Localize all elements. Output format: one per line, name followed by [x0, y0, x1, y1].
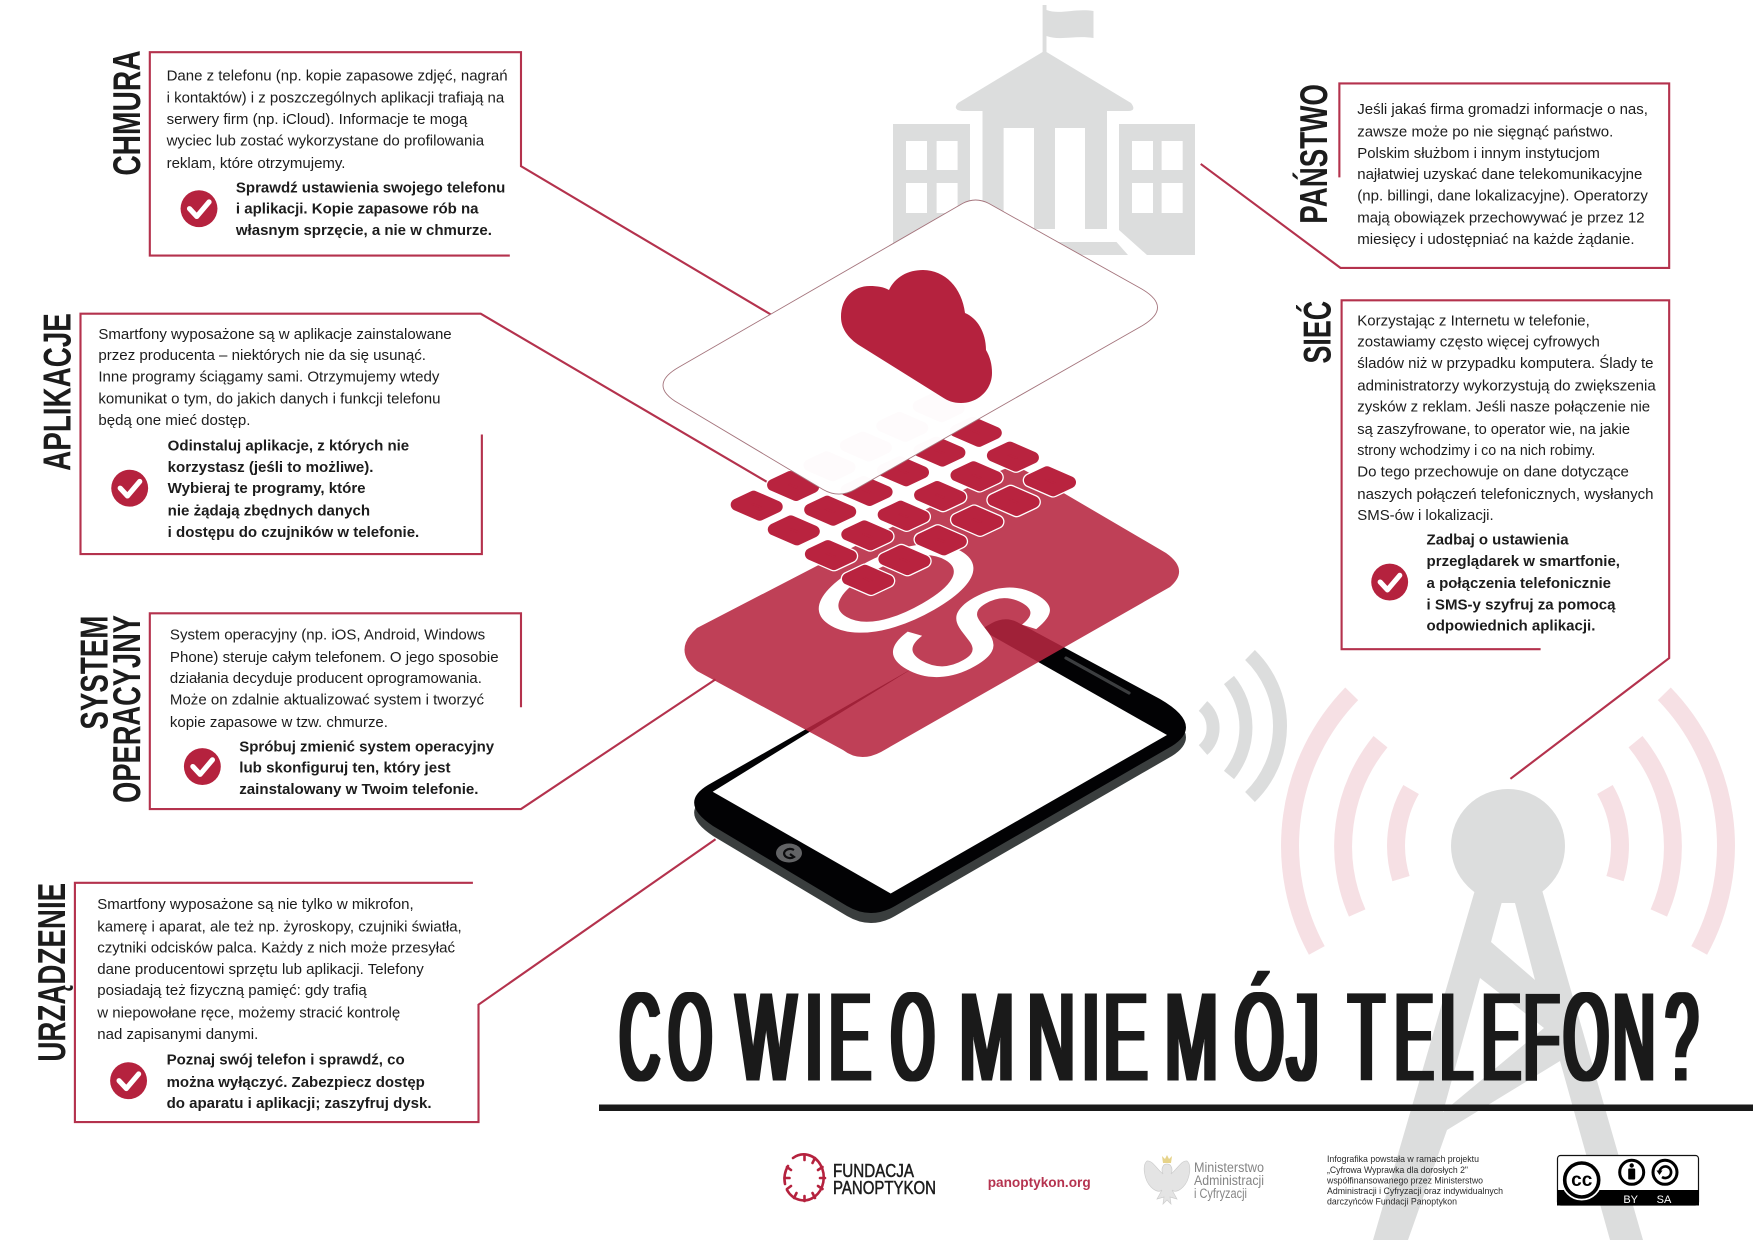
advice text: system operacyjny: lub skonfiguruj ten, który jest — [239, 761, 451, 777]
credits text: „Cyfrowa Wyprawka dla dorosłych 2" — [1327, 1165, 1468, 1175]
body text: chmura: wyciec lub zostać wykorzystane do profilowania — [166, 133, 485, 149]
icon: check siec — [1371, 564, 1408, 601]
advice text: aplikacje: i dostępu do czujników w telefonie. — [168, 525, 419, 541]
body text: system operacyjny: kopie zapasowe w tzw. chmurze. — [170, 715, 388, 731]
title — [620, 966, 1698, 1109]
heading: chmura: CHMURA — [106, 50, 149, 176]
panel: urzadzenie — [31, 839, 716, 1122]
advice text: chmura: własnym sprzęcie, a nie w chmurze. — [235, 223, 492, 239]
logo: ministry — [1144, 1155, 1264, 1204]
title rule — [599, 1104, 1753, 1111]
license badge: CC BY SA: SA — [1657, 1194, 1672, 1206]
body text: chmura: Dane z telefonu (np. kopie zapasowe zdjęć, nagrań — [167, 69, 508, 85]
credits text: Administracji i Cyfryzacji oraz indywidualnych — [1327, 1186, 1503, 1196]
title: TELEFON? — [1349, 966, 1698, 1108]
body text: chmura: i kontaktów) i z poszczególnych aplikacji trafiają na — [167, 90, 505, 106]
heading: urzadzenie: URZĄDZENIE — [31, 883, 74, 1062]
logo ring — [784, 1154, 825, 1201]
icon: eagle — [1144, 1155, 1190, 1204]
body text: chmura — [166, 69, 508, 172]
body text: panstwo: Polskim służbom i innym instytucjom — [1357, 146, 1600, 162]
panel: aplikacje — [36, 313, 768, 554]
license badge: CC BY SA — [1557, 1156, 1699, 1206]
title: O — [891, 967, 934, 1108]
body text: siec: zostawiamy często więcej cyfrowych — [1357, 335, 1600, 351]
heading: system operacyjny: SYSTEM — [73, 616, 116, 730]
title: MÓJ — [1165, 968, 1319, 1109]
title: CO — [620, 967, 712, 1108]
body text: system operacyjny: Może on zdalnie aktualizować system i tworzyć — [170, 692, 484, 708]
advice text: urzadzenie: można wyłączyć. Zabezpiecz dostęp — [167, 1075, 425, 1091]
icon: check chmura — [181, 190, 217, 227]
title: MNIE — [960, 968, 1148, 1108]
advice text: urzadzenie: Poznaj swój telefon i sprawdź, co — [167, 1052, 405, 1068]
logo: ministry: Administracji — [1194, 1173, 1264, 1188]
logo: Fundacja Panoptykon: PANOPTYKON — [833, 1178, 936, 1198]
body text: panstwo: zawsze może po nie sięgnąć państwo. — [1357, 125, 1613, 141]
advice text: system operacyjny — [239, 739, 494, 798]
logo: ministry: Ministerstwo — [1194, 1160, 1264, 1175]
callout frame: urzadzenie — [75, 839, 716, 1122]
tower signal waves — [1290, 694, 1726, 950]
body text: urzadzenie: w niepowołane ręce, możemy stracić kontrolę — [96, 1006, 400, 1022]
advice text: urzadzenie: do aparatu i aplikacji; zaszyfruj dysk. — [167, 1096, 432, 1112]
advice text: aplikacje: nie żądają zbędnych danych — [168, 504, 370, 520]
advice text: system operacyjny: Spróbuj zmienić system operacyjny — [239, 739, 494, 755]
advice text: siec: Zadbaj o ustawienia — [1427, 533, 1570, 549]
heading: system operacyjny: OPERACYJNY — [106, 615, 149, 803]
body text: siec: śladów niż w przypadku komputera. Ślady te — [1357, 354, 1654, 372]
credits text: Infografika powstała w ramach projektu — [1327, 1154, 1479, 1164]
logo: ministry: i Cyfryzacji — [1194, 1186, 1247, 1201]
body text: siec: SMS-ów i lokalizacji. — [1357, 508, 1494, 524]
icon: phone signal waves — [1203, 655, 1280, 797]
OS letters: OS — [753, 506, 1108, 711]
advice text: aplikacje: Odinstaluj aplikacje, z których nie — [168, 439, 409, 455]
advice text: chmura: Sprawdź ustawienia swojego telefonu — [236, 180, 505, 196]
illustration: phone — [694, 619, 1186, 923]
heading: siec: SIEĆ — [1295, 301, 1339, 363]
body text: system operacyjny: Phone) steruje całym telefonem. O jego sposobie — [170, 650, 499, 666]
illustration: apps grid — [737, 398, 1070, 589]
phone speaker — [1066, 658, 1129, 693]
tower mast — [1373, 789, 1643, 1240]
advice text: system operacyjny: zainstalowany w Twoim telefonie. — [239, 782, 479, 798]
panel: siec — [1295, 300, 1669, 779]
body text: siec — [1357, 313, 1657, 524]
icon: cloud — [841, 270, 992, 403]
phone screen — [713, 628, 1167, 894]
body text: chmura: serwery firm (np. iCloud). Informacje te mogą — [167, 112, 468, 128]
body text: siec: Korzystając z Internetu w telefonie, — [1357, 313, 1590, 329]
body text: siec: są zaszyfrowane, to operator wie, na jakie — [1357, 422, 1630, 438]
phone home button — [776, 844, 802, 862]
icon: check system — [184, 748, 221, 785]
credits text: współfinansowanego przez Ministerstwo — [1326, 1176, 1483, 1186]
body text: siec: Do tego przechowuje on dane dotyczące — [1357, 464, 1629, 480]
advice text: siec: a połączenia telefonicznie — [1427, 576, 1611, 592]
icon: check aplikacje — [111, 470, 148, 507]
icon: government building — [893, 5, 1195, 255]
credits text: darczyńców Fundacji Panoptykon — [1327, 1196, 1457, 1206]
illustration: cloud layer — [663, 200, 1158, 494]
credits text — [1326, 1154, 1503, 1206]
body text: aplikacje — [98, 327, 452, 429]
heading: aplikacje: APLIKACJE — [36, 313, 79, 471]
panel: chmura — [106, 50, 771, 315]
license badge: CC BY SA: BY — [1623, 1194, 1639, 1206]
body text: urzadzenie: czytniki odcisków palca. Każdy z nich może przesyłać — [97, 941, 455, 957]
body text: urzadzenie: Smartfony wyposażone są nie tylko w mikrofon, — [97, 897, 414, 913]
body text: urzadzenie: dane producentowi sprzętu lub aplikacji. Telefony — [97, 962, 425, 978]
body text: panstwo: miesięcy i udostępniać na każde żądanie. — [1357, 232, 1635, 248]
advice text: aplikacje: Wybieraj te programy, które — [168, 481, 366, 497]
body text: aplikacje: Smartfony wyposażone są w aplikacje zainstalowane — [98, 327, 452, 343]
body text: urzadzenie: kamerę i aparat, ale też np. żyroskopy, czujniki światła, — [97, 919, 462, 935]
body text: system operacyjny: System operacyjny (np. iOS, Android, Windows — [170, 628, 485, 644]
body text: panstwo: (np. billingi, dane lokalizacyjne). Operatorzy — [1357, 188, 1649, 204]
callout frame: system operacyjny — [150, 613, 716, 809]
callout frame: chmura — [150, 52, 771, 315]
body text: chmura: reklam, które otrzymujemy. — [167, 156, 345, 172]
body text: panstwo: mają obowiązek przechowywać je przez 12 — [1357, 211, 1645, 227]
icon: check urzadzenie — [110, 1062, 147, 1099]
advice text: aplikacje — [168, 439, 419, 541]
body text: aplikacje: będą one mieć dostęp. — [98, 413, 250, 429]
body text: aplikacje: przez producenta – niektórych nie da się usunąć. — [98, 348, 426, 364]
body text: siec: strony wchodzimy i co na nich robimy. — [1357, 443, 1595, 459]
advice text: siec — [1427, 533, 1620, 635]
body text: urzadzenie: nad zapisanymi danymi. — [97, 1027, 258, 1043]
panel: panstwo — [1201, 83, 1669, 268]
advice text: siec: i SMS-y szyfruj za pomocą — [1427, 597, 1617, 613]
body text: system operacyjny — [170, 628, 499, 731]
advice text: chmura: i aplikacji. Kopie zapasowe rób na — [236, 202, 480, 218]
callout frame: siec — [1342, 300, 1669, 779]
logo: Fundacja Panoptykon — [784, 1154, 936, 1201]
body text: urzadzenie — [96, 897, 462, 1043]
body text: siec: zysków z reklam. Jeśli nasze połączenie nie — [1357, 400, 1650, 416]
body text: panstwo: Jeśli jakaś firma gromadzi informacje o nas, — [1357, 102, 1648, 118]
heading: panstwo: PAŃSTWO — [1292, 84, 1336, 224]
icon: radio tower — [1290, 694, 1726, 1240]
website link: panoptykon.org — [988, 1174, 1091, 1190]
body text: system operacyjny: działania decyduje producent oprogramowania. — [170, 671, 482, 687]
advice text: urzadzenie — [167, 1052, 432, 1112]
heading: system operacyjny — [73, 615, 149, 803]
advice text: chmura — [235, 180, 505, 239]
body text: panstwo — [1357, 102, 1649, 248]
body text: panstwo: najłatwiej uzyskać dane telekomunikacyjne — [1357, 167, 1642, 183]
license badge: CC BY SA: cc — [1571, 1170, 1593, 1191]
advice text: aplikacje: korzystasz (jeśli to możliwe). — [168, 460, 373, 476]
body text: aplikacje: komunikat o tym, do jakich danych i funkcji telefonu — [98, 392, 440, 408]
advice text: siec: odpowiednich aplikacji. — [1427, 619, 1595, 635]
advice text: siec: przeglądarek w smartfonie, — [1427, 554, 1620, 570]
body text: siec: administratorzy wykorzystują do zwiększenia — [1357, 378, 1657, 394]
body text: aplikacje: Inne programy ściągamy sami. Otrzymujemy wtedy — [98, 369, 440, 385]
panel: system operacyjny — [73, 613, 716, 809]
callout frame: panstwo — [1201, 83, 1669, 268]
title: WIE — [736, 968, 871, 1109]
logo: Fundacja Panoptykon: FUNDACJA — [833, 1161, 914, 1181]
body text: urzadzenie: posiadają też fizyczną pamięć: gdy trafią — [97, 983, 368, 999]
body text: siec: naszych połączeń telefonicznych, wysłanych — [1357, 487, 1654, 503]
callout frame: aplikacje — [80, 314, 768, 554]
illustration: operating system layer — [684, 468, 1179, 757]
